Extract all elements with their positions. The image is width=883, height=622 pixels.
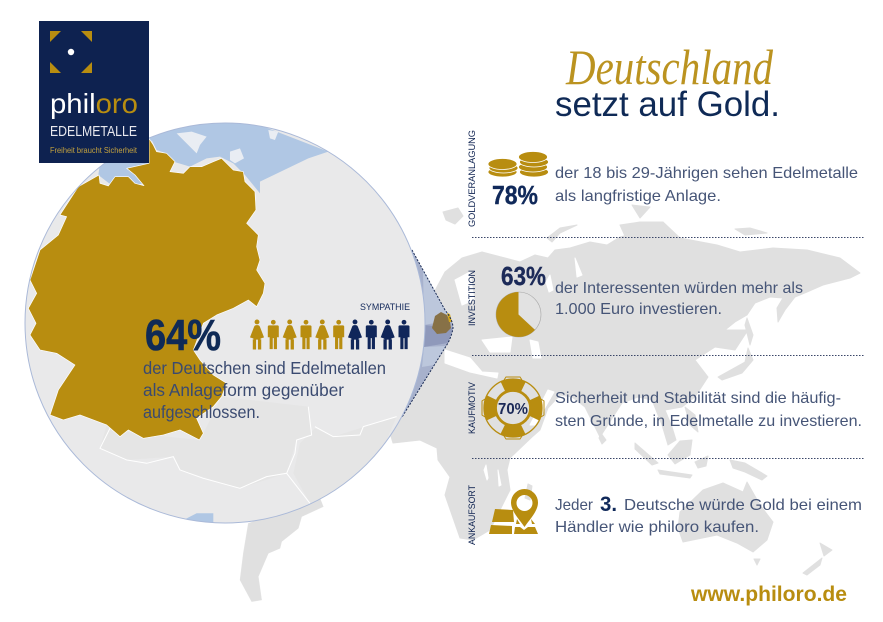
country borders: [100, 407, 397, 503]
section: Kaufmotiv: [467, 377, 862, 439]
description: der Interessenten würden mehr als: [555, 280, 803, 297]
stat number: 70%: [498, 401, 528, 418]
description: [555, 165, 858, 205]
map: South America: [240, 498, 323, 602]
map: Japan: [718, 348, 753, 380]
wedge dashed edges: [402, 250, 453, 417]
title: [555, 39, 780, 124]
website url: www.philoro.de: [690, 583, 847, 606]
southern regions: [100, 397, 397, 503]
section: Investition: [467, 261, 803, 337]
map: Novaya Zemlya: [547, 225, 577, 242]
circle outline: [25, 123, 425, 523]
wedge light lower: [422, 346, 446, 367]
description: [555, 493, 862, 536]
Danish islands: [177, 130, 278, 163]
stat description: aufgeschlossen.: [143, 402, 260, 422]
icon: lifebuoy: [482, 377, 544, 439]
circle map contents: [28, 120, 397, 525]
map: Arctic islands: [620, 205, 767, 236]
section dividers: [472, 238, 865, 458]
map: Sulawesi and Philippines: [685, 407, 708, 468]
section label: KAUFMOTIV: [467, 381, 478, 434]
description: Sicherheit und Stabilität sind die häufig-: [555, 390, 841, 407]
section label: ANKAUFSORT: [467, 485, 478, 545]
stat description: der Deutschen sind Edelmetallen: [143, 358, 386, 378]
section label: GOLDVERANLAGUNG: [467, 130, 478, 227]
description: 1.000 Euro investieren.: [555, 301, 722, 318]
pictogram row: 6 of 10 gold: [250, 320, 410, 350]
description: sten Gründe, in Edelmetalle zu investieren.: [555, 413, 862, 430]
stat description: [143, 358, 386, 422]
wedge dark band: [424, 325, 453, 347]
logo dot: [68, 49, 74, 55]
description: [555, 390, 862, 430]
description: als langfristige Anlage.: [555, 188, 721, 205]
Germany: [28, 138, 265, 440]
description: Deutsche würde Gold bei einem: [624, 497, 862, 514]
icon: map with pin: [489, 489, 538, 534]
logo panel: [39, 21, 149, 163]
title sans line: setzt auf Gold.: [555, 85, 780, 124]
world map background: [240, 205, 860, 602]
logo wordmark: philoro: [50, 88, 138, 119]
description: Händler wie philoro kaufen.: [555, 519, 759, 536]
map: Tasmania: [754, 559, 760, 565]
stat number: 78%: [492, 180, 538, 210]
icon: coins: [488, 152, 548, 177]
map: Sri Lanka: [599, 433, 606, 444]
logo subtitle: EDELMETALLE: [50, 124, 137, 140]
map: Svalbard: [443, 208, 463, 224]
pie chart: 63 percent: [496, 292, 541, 337]
title script line: Deutschland: [565, 39, 774, 95]
section label: INVESTITION: [467, 270, 478, 326]
logo background: [39, 21, 149, 163]
map: Borneo: [668, 440, 692, 464]
description: 3.: [600, 493, 617, 516]
section: Ankaufsort: [467, 485, 862, 545]
map: Madagascar: [525, 484, 532, 500]
magnifier wedge: [380, 250, 453, 417]
headline stat: 64 percent: [143, 311, 386, 422]
bottom sea: [186, 513, 214, 522]
section: Goldveranlagung: [467, 130, 858, 227]
description: Jeder: [555, 497, 594, 514]
map: New Zealand: [803, 543, 832, 575]
map: Sakhalin: [745, 318, 753, 345]
wedge fill: [380, 250, 453, 417]
tiny Germany yellow edge: [447, 313, 452, 322]
stat description: als Anlageform gegenüber: [143, 380, 344, 400]
sea: [98, 120, 328, 193]
sympathy label: SYMPATHIE: [360, 302, 410, 312]
logo claim: Freiheit braucht Sicherheit: [50, 146, 138, 155]
map: Sumatra: [635, 443, 658, 465]
description: der 18 bis 29-Jährigen sehen Edelmetalle: [555, 165, 858, 182]
logo corner marks: [50, 31, 92, 73]
map: Eurasia and Africa: [380, 222, 860, 540]
map: New Guinea: [730, 460, 767, 480]
big number: 64%: [145, 311, 221, 360]
description: [555, 280, 803, 318]
map: inland seas: [445, 258, 582, 486]
map: Australia: [678, 482, 773, 552]
tiny Germany: [432, 312, 451, 334]
stat number: 63%: [501, 261, 546, 291]
map: Java: [658, 470, 692, 478]
wedge light top: [423, 270, 451, 325]
magnifier circle: [25, 120, 425, 525]
circle fill: [25, 123, 425, 523]
